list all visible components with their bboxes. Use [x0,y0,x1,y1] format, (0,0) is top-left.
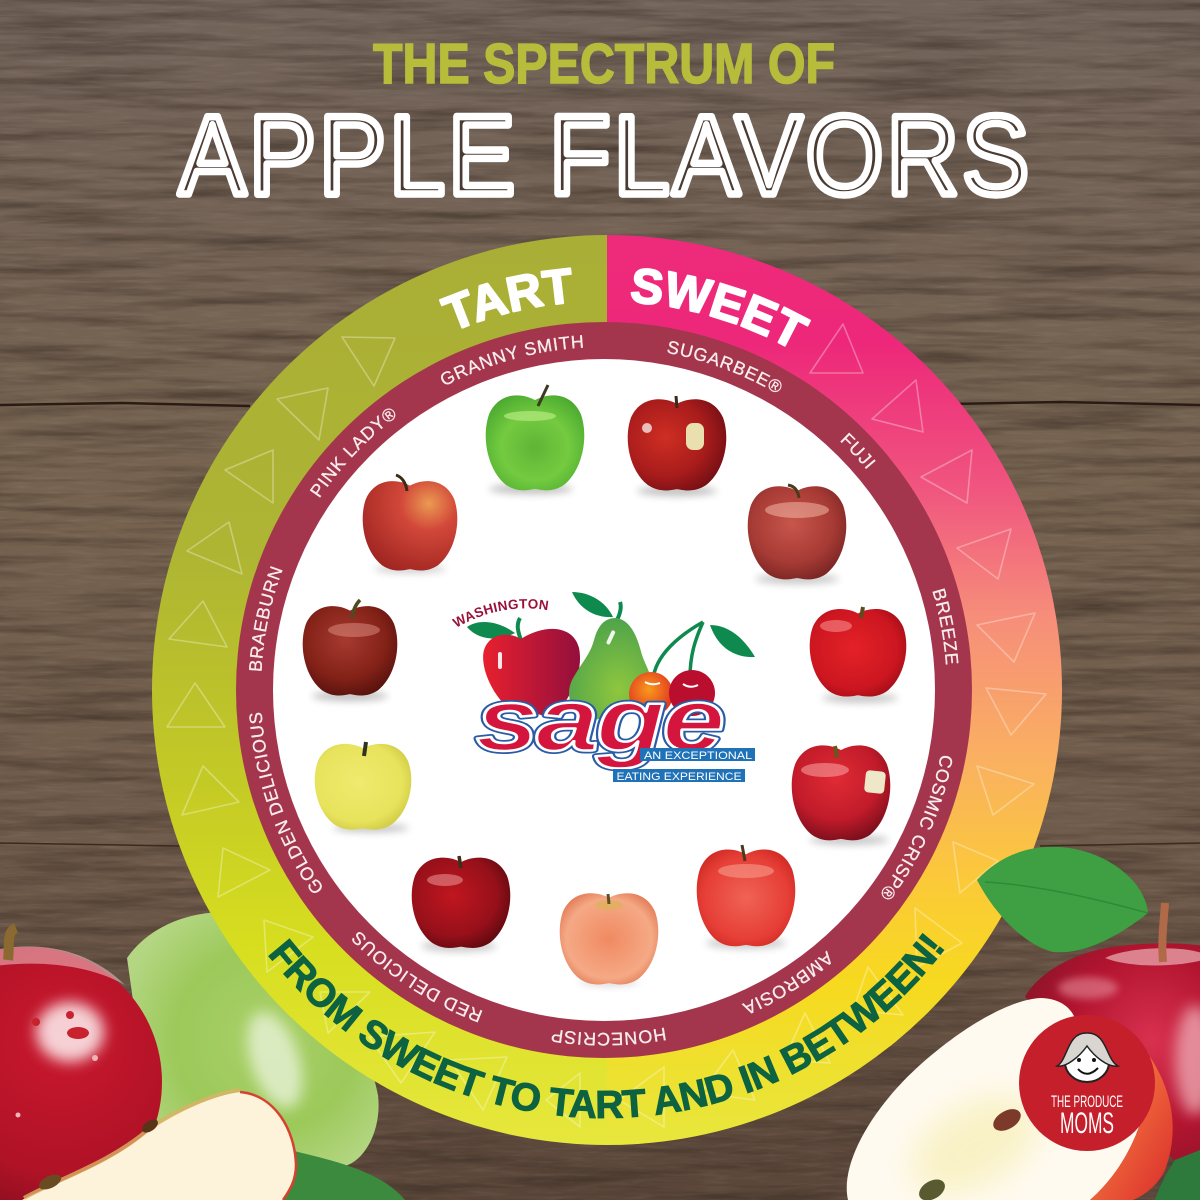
apple variety labels: SUGARBEE® [667,341,782,392]
apple: honeycrisp [560,893,658,986]
sweet half of outer ring [607,235,1062,1145]
logo tagline 1: AN EXCEPTIONAL [644,750,752,762]
apple: cosmic crisp [792,745,890,845]
bottom left apples [0,928,405,1200]
apple variety labels: BRAEBURN [249,566,282,671]
flavor wheel [152,235,1062,1145]
logo cherries [629,622,755,716]
maroon label ring [236,322,972,1058]
tart label: TART [439,267,572,329]
apple variety labels: PINK LADY® [310,408,396,498]
apple variety labels [249,335,958,1046]
red apple [0,928,162,1200]
apple: ambrosia [697,845,795,949]
white center [273,359,935,1021]
apple: fuji [748,485,846,584]
green apple behind wheel [127,912,379,1167]
apple variety labels: BREEZE [932,588,958,665]
heading: apple flavors: APPLE FLAVORS [179,94,1029,218]
apple slice [22,1090,296,1200]
subtitle: the spectrum of: THE SPECTRUM OF [373,32,835,96]
badge text: the produce: THE PRODUCE [1051,1092,1123,1111]
logo apple [467,618,580,718]
logo wordmark: washington: WASHINGTON [452,599,548,627]
small leaf [1155,1150,1200,1200]
logo wordmark: sage: sage [476,672,723,769]
apple: sugarbee [628,396,726,496]
logo tagline 2: EATING EXPERIENCE [616,771,742,783]
red apple [1025,903,1200,1160]
bottom right apples [847,847,1200,1200]
apple variety labels: GRANNY SMITH [440,335,583,384]
apple variety labels: GOLDEN DELICIOUS [249,712,322,893]
apple: granny smith [486,385,584,494]
title [179,32,1029,218]
ring tagline: FROM SWEET TO TART AND IN BETWEEN! [268,932,944,1118]
green leaf [977,847,1148,952]
apple: golden delicious [315,742,411,832]
washington sage logo [452,592,755,783]
leaf under slice [285,1150,405,1200]
triangle pattern on outer ring [167,324,1046,1127]
tart half of outer ring [152,235,607,1145]
icon: smiling mom face [1057,1033,1118,1082]
apple: red delicious [412,856,510,952]
apple variety labels: AMBROSIA [742,950,831,1014]
apple variety labels: RED DELICIOUS [352,932,482,1022]
badge text: moms: MOMS [1060,1107,1114,1140]
logo wordmark: sage: sage [476,672,723,769]
apple variety labels: COSMIC CRISP® [882,756,952,900]
produce moms badge [1019,1015,1155,1151]
sweet label: SWEET [630,268,811,347]
apple: braeburn [303,600,397,701]
apple: breeze [810,607,906,703]
logo pear [569,592,652,721]
apple: pink lady [363,475,457,573]
apple slice [847,998,1173,1200]
apple variety labels: FUJI [840,432,876,469]
apple variety labels: HONECRISP [552,1028,666,1046]
